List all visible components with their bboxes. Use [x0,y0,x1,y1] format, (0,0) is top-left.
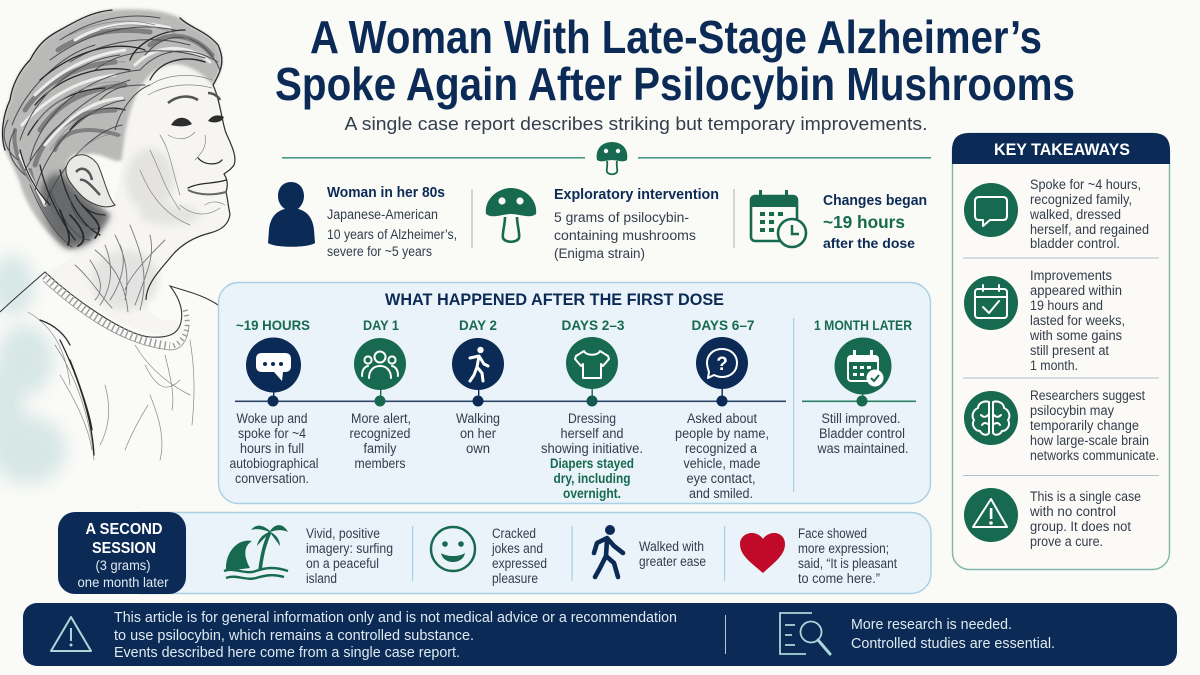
column: days 2-3: showing initiative. [541,441,643,456]
icon: calendar with clock [751,190,806,247]
session badge: SESSION [92,540,156,557]
column: day 1: More alert, [351,411,411,426]
fact: changes began: Changes began [823,193,927,209]
skin of face and neck [44,61,235,336]
item: walked with ease: greater ease [639,554,706,569]
session badge: one month later [78,575,169,590]
sweater collar ribbing [45,276,170,346]
watercolor background wash [0,255,66,484]
fact: woman in her 80s: Woman in her 80s [327,185,445,201]
item: vivid imagery [224,525,393,586]
column: 1 month later: Bladder control [819,426,905,441]
neck sketch lines [75,225,165,312]
icon: mushroom [486,188,536,242]
session badge [58,512,186,594]
icon: red heart [740,533,785,573]
column: day 1: family [364,441,397,456]
facial wrinkles [140,75,225,225]
nose and mouth [188,158,226,188]
takeaway: timing: appeared within [1030,283,1122,298]
column: 1 month later: was maintained. [817,441,908,456]
icon: t-shirt [566,337,618,406]
fact: exploratory intervention [486,187,719,261]
column: day 2: own [466,441,490,456]
takeaway: timing: 1 month. [1030,358,1078,373]
icon: walking person [452,338,504,406]
panel header: KEY TAKEAWAYS [994,140,1130,159]
column: ~19 hours: Woke up and [236,411,308,426]
icon: question bubble [696,337,748,406]
icon: calendar check [964,276,1018,330]
icon: warning triangle [964,488,1018,542]
column: day 2: DAY 2 [459,317,497,333]
divider with mushroom icon [282,142,931,174]
session badge: (3 grams) [96,558,150,573]
icon: smiling face [431,527,475,571]
item: vivid imagery: island [306,571,337,586]
item: cracked jokes: expressed [492,556,547,571]
column: days 6-7: people by name, [675,426,769,441]
item: more expression [740,526,897,586]
shaded skin areas [91,148,200,310]
fact: changes began [751,190,927,251]
takeaway: brain networks: Researchers suggest [1030,388,1145,403]
heading: WHAT HAPPENED AFTER THE FIRST DOSE [385,290,724,309]
fact: exploratory intervention: (Enigma strain) [554,246,645,261]
icon: calendar with check [834,338,892,406]
column: 1 month later [814,317,912,456]
column: day 2 [452,317,504,456]
column: day 1 [350,317,411,471]
column: ~19 hours [230,317,318,486]
session badge: A SECOND [86,521,162,538]
column: day 2: on her [460,426,496,441]
takeaway: timing: 19 hours and [1030,298,1103,313]
fact: exploratory intervention: 5 grams of psilocybin- [554,210,689,225]
icon: palm island and wave [224,525,288,579]
takeaway: timing [964,268,1125,373]
item: vivid imagery: imagery: surfing [306,541,393,556]
item: more expression: more expression; [798,541,889,556]
fact: woman in her 80s: 10 years of Alzheimer’s, [327,227,457,242]
column: ~19 hours: spoke for ~4 [238,426,306,441]
column: day 1: members [354,456,406,471]
takeaway: what changed: herself, and regained [1030,222,1149,237]
light hair highlights [20,24,210,205]
item: more expression: to come here.” [798,571,880,586]
title: Spoke Again After Psilocybin Mushrooms [275,58,1075,110]
column: days 2-3: overnight. [563,486,621,501]
column: days 2-3 [541,317,643,501]
column: days 2-3: DAYS 2–3 [562,317,625,333]
column: days 6-7: DAYS 6–7 [692,317,755,333]
column: day 1: DAY 1 [363,317,399,333]
panel: a second session [58,512,931,594]
column: 1 month later: Still improved. [822,411,900,426]
item: walked with ease: Walked with [639,539,704,554]
panel: what happened after the first dose [218,282,930,504]
item: more expression: said, “It is pleasant [798,556,897,571]
fact: woman in her 80s [268,182,457,259]
portrait sketch of elderly woman [0,9,235,460]
panel: key takeaways [952,133,1170,570]
takeaway: caution [964,488,1141,549]
column: days 6-7: eye contact, [686,471,756,486]
column: days 6-7: vehicle, made [684,456,760,471]
hair mass [3,9,222,248]
disclaimer text: This article is for general information only and is not medical advice or a recommendation [114,610,677,626]
takeaway: timing: Improvements [1030,268,1112,283]
disclaimer text [114,610,677,661]
icon: document with magnifier [780,613,830,654]
research note: More research is needed. [851,617,1012,633]
takeaway: caution: group. It does not [1030,519,1131,534]
column: days 6-7: and smiled. [689,486,753,501]
dark under-hair [40,174,110,248]
item: vivid imagery: Vivid, positive [306,526,380,541]
icon: warning [51,617,91,651]
fact: changes began: after the dose [823,235,915,251]
takeaway: caution: with no control [1029,504,1116,519]
column: 1 month later: 1 MONTH LATER [814,317,912,333]
fact: changes began: ~19 hours [823,212,905,232]
column: days 6-7: Asked about [687,411,757,426]
takeaway: what changed: Spoke for ~4 hours, [1030,177,1141,192]
item: walked with ease [594,525,706,577]
column: ~19 hours: conversation. [235,471,309,486]
column: days 6-7: recognized a [685,441,757,456]
column: days 2-3: Diapers stayed [550,456,634,471]
column: ~19 hours: autobiographical [230,456,318,471]
item: cracked jokes [431,526,547,586]
footer disclaimer banner [23,603,1177,666]
timeline axis [235,318,916,492]
item: more expression: Face showed [798,526,867,541]
column: days 2-3: dry, including [554,471,630,486]
icon: speech bubble [964,183,1018,237]
title: A Woman With Late-Stage Alzheimer’s [310,11,1042,63]
subtitle: A single case report describes striking but temporary improvements. [344,113,928,134]
takeaway: brain networks: networks communicate. [1030,448,1159,463]
fact: exploratory intervention: containing mushrooms [554,228,696,243]
takeaway: what changed: walked, dressed [1029,207,1121,222]
facial profile [146,85,235,300]
item: vivid imagery: on a peaceful [306,556,379,571]
takeaway: timing: lasted for weeks, [1030,313,1125,328]
takeaway: brain networks: psilocybin may [1030,403,1114,418]
sweater outline [0,272,218,337]
icon: family group [354,338,406,406]
takeaway: brain networks: temporarily change [1030,418,1139,433]
icon: person [268,182,315,247]
icon: speech bubble [246,338,301,406]
takeaway: timing: with some gains [1029,328,1122,343]
research note: Controlled studies are essential. [851,636,1055,652]
fact: woman in her 80s: severe for ~5 years [327,244,432,259]
column: day 1: recognized [350,426,410,441]
takeaway: caution: prove a cure. [1030,534,1103,549]
item: cracked jokes: pleasure [492,571,538,586]
icon: question bubble: ? [716,354,728,375]
takeaway: what changed: recognized family, [1030,192,1132,207]
item: cracked jokes: Cracked [492,526,536,541]
takeaway: brain networks: how large-scale brain [1030,433,1149,448]
eyes and brows [168,97,198,103]
title [275,11,1075,110]
sweater shading strokes [28,312,194,460]
column: days 6-7 [675,317,769,501]
takeaway: brain networks [964,388,1159,463]
research note [851,617,1055,652]
ear [66,155,115,207]
fact: woman in her 80s: Japanese-American [327,207,438,222]
disclaimer text: to use psilocybin, which remains a controlled substance. [114,628,474,644]
item: cracked jokes: jokes and [491,541,543,556]
takeaway: what changed [964,177,1149,251]
hair strands [3,10,222,247]
column: days 2-3: Dressing [568,411,616,426]
column: days 2-3: herself and [560,426,624,441]
takeaway: caution: This is a single case [1030,489,1141,504]
takeaway: what changed: bladder control. [1030,236,1120,251]
column: day 2: Walking [456,411,500,426]
takeaway: timing: still present at [1030,343,1109,358]
panel header [952,133,1170,164]
column: ~19 hours: hours in full [240,441,304,456]
icon: brain [964,391,1018,445]
fact: exploratory intervention: Exploratory intervention [554,187,719,203]
icon: walking figure [594,525,623,577]
column: ~19 hours: ~19 HOURS [236,317,310,333]
dark hair locks [14,30,212,232]
disclaimer text: Events described here come from a single case report. [114,645,460,661]
